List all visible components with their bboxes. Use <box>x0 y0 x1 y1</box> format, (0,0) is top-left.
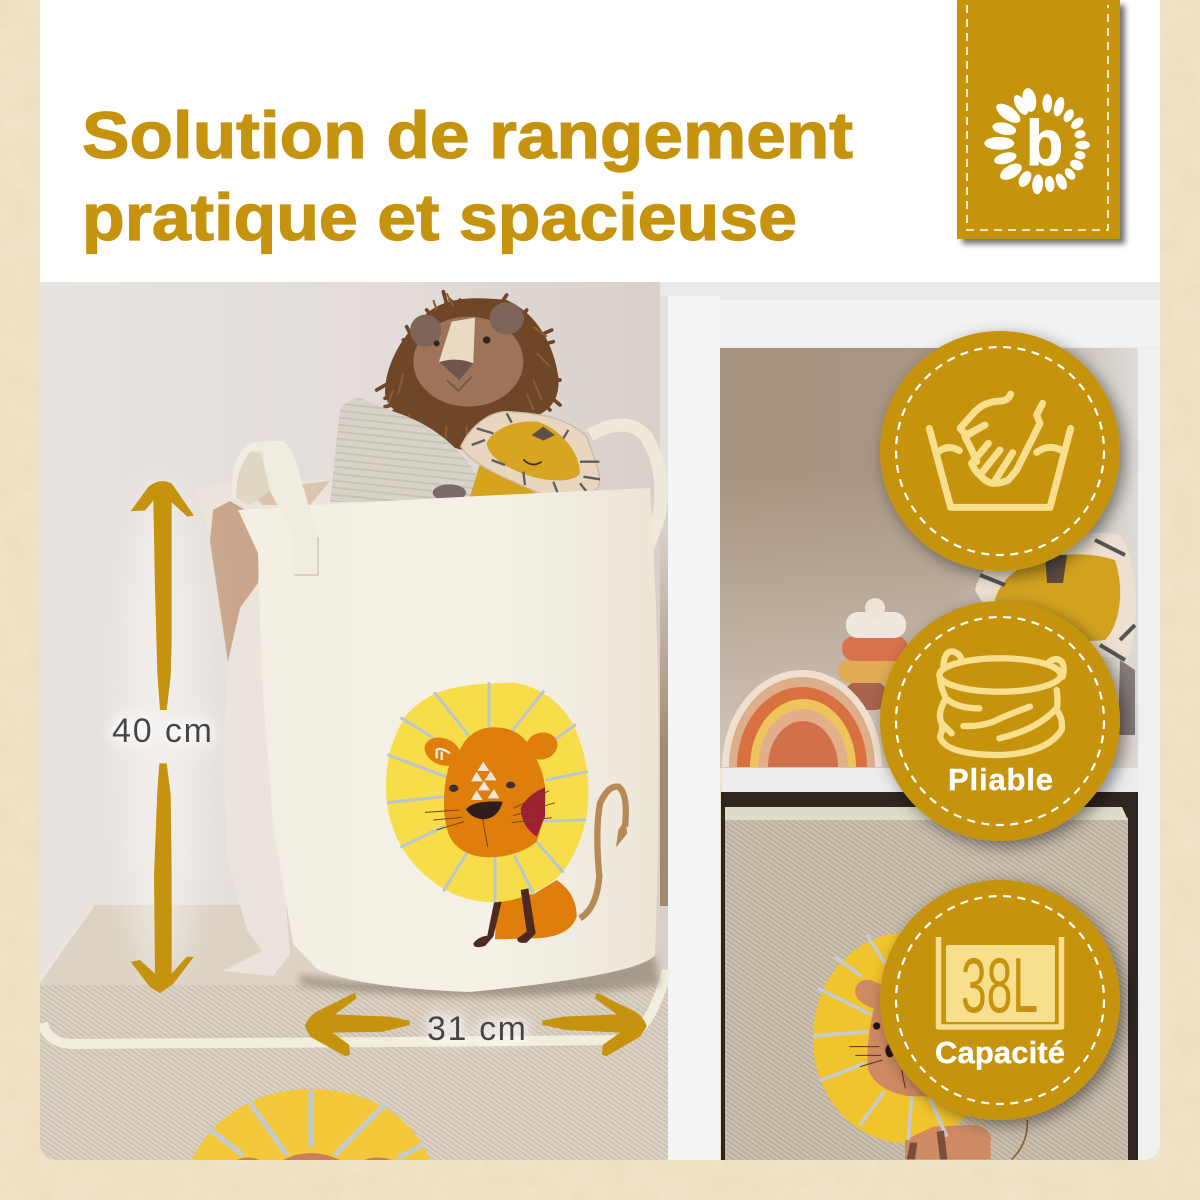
icon: folded basket <box>939 651 1064 755</box>
lion appliqué on basket <box>386 683 627 947</box>
lion mane <box>377 292 560 452</box>
label: Capacité: Capacité <box>935 1035 1065 1070</box>
lion body and tail <box>495 787 627 939</box>
basket rear handle <box>590 425 661 555</box>
title <box>82 98 853 254</box>
icon: 38 litre container <box>938 937 1062 1029</box>
plush lion on shelf <box>975 532 1136 735</box>
basket front handle <box>232 441 318 575</box>
wall <box>40 282 680 982</box>
canvas basket <box>238 488 659 992</box>
woven cushion <box>330 398 479 502</box>
label: 40 cm: 40 cm <box>112 712 212 750</box>
title: pratique et spacieuse <box>82 180 797 254</box>
rainbow toy <box>722 670 882 767</box>
lion appliqué on right box <box>813 933 1027 1159</box>
storage box left <box>40 905 668 1160</box>
lower arrow <box>131 763 194 993</box>
muslin blanket <box>210 481 330 976</box>
title: Solution de rangement <box>82 98 853 172</box>
plush lion toy in basket <box>377 292 560 452</box>
lion mane <box>386 683 588 902</box>
label: Pliable: Pliable <box>948 762 1053 797</box>
badge: foldable <box>880 601 1120 841</box>
brand tag with logo <box>957 0 1120 239</box>
lion legs <box>473 888 536 947</box>
photo scene <box>40 282 1160 1160</box>
storage box right <box>725 807 1128 1160</box>
badge: capacity <box>880 880 1120 1120</box>
lion face <box>413 317 523 407</box>
basket shadow <box>300 955 660 996</box>
badge: hand wash <box>880 331 1120 571</box>
icon: sunflower logo: b <box>1026 107 1063 179</box>
upper arrow <box>131 481 194 710</box>
lion ears <box>410 302 524 347</box>
lion head <box>420 727 561 857</box>
icon: hand wash tub <box>929 394 1071 507</box>
measure arrow: height 40 cm <box>120 480 204 993</box>
white shelving unit <box>660 282 1160 1160</box>
stacking toy <box>838 598 908 710</box>
measure arrow: width 31 cm <box>305 993 647 1056</box>
icon: 38 litre container: 38L <box>961 941 1038 1029</box>
lion appliqué on left box <box>192 1089 430 1160</box>
small yellow lion toy <box>433 412 600 501</box>
label: 31 cm: 31 cm <box>427 1010 526 1048</box>
white header panel <box>40 0 1160 282</box>
icon: sunflower logo <box>984 87 1090 195</box>
